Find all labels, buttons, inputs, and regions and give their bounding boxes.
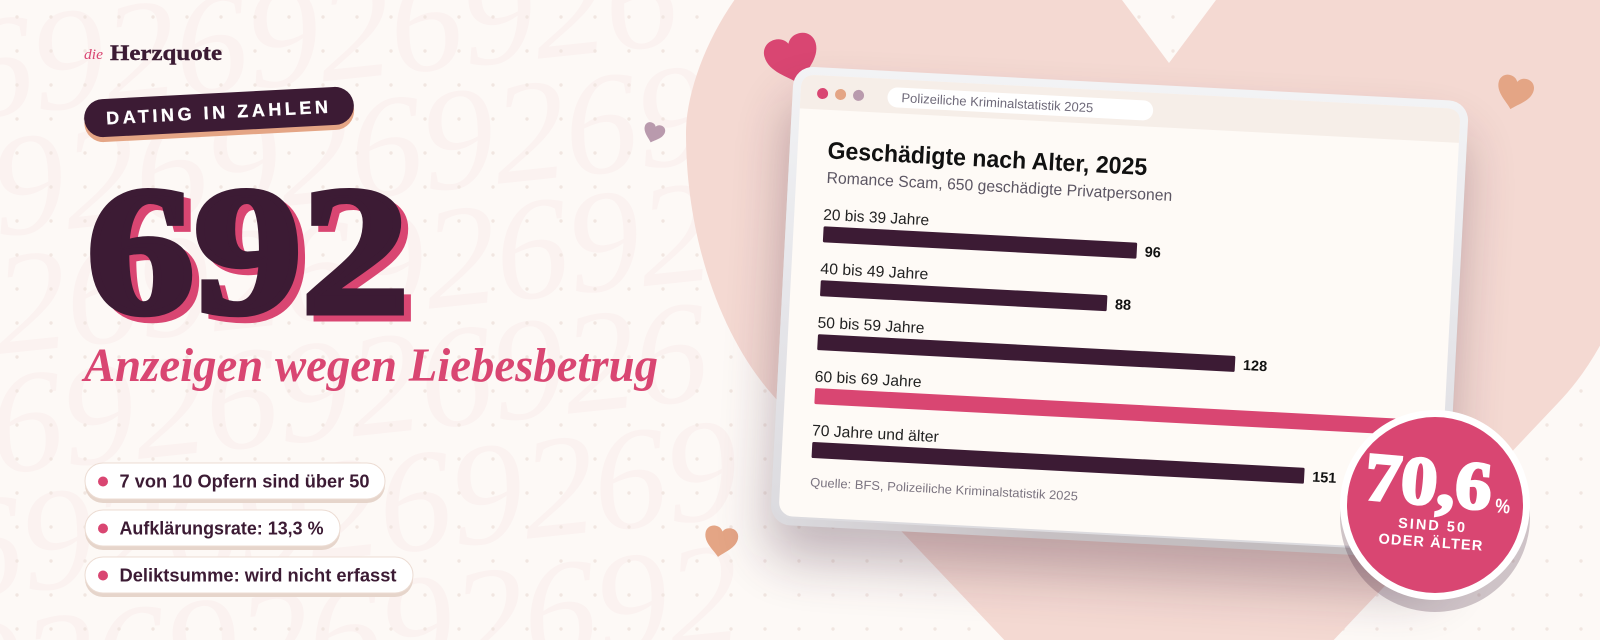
tag: Dating in Zahlen [83, 86, 355, 143]
logo: die Herzquote: Herzquote [110, 40, 222, 65]
browser card [770, 66, 1473, 560]
background pattern: repeated 692 numerals: 6926926926 [0, 269, 715, 506]
bar chart: 50 bis 59 Jahre [817, 315, 925, 337]
fact pill 3 [85, 557, 413, 597]
bar chart: 20 bis 39 Jahre [823, 207, 930, 229]
logo: die Herzquote: die [84, 47, 103, 63]
headline number 692: 692 [87, 151, 409, 352]
browser title bar [800, 74, 1461, 143]
bar chart: 96 [1144, 245, 1161, 261]
big background heart [686, 0, 1600, 640]
badge: 70,6 %: ODER ÄLTER [1378, 530, 1483, 555]
card shadow [766, 100, 1465, 593]
headline number 692: 692 [94, 157, 416, 358]
bar chart: 151 [1312, 470, 1337, 487]
bar chart: 70 Jahre und älter [811, 422, 939, 446]
source note: Quelle: BFS, Polizeiliche Kriminalstatistik 2025 [810, 475, 1078, 503]
fact pill 2 [85, 510, 340, 550]
chart subtitle: Romance Scam, 650 geschädigte Privatpersonen [826, 170, 1173, 205]
fact pill 1: 7 von 10 Opfern sind über 50 [120, 472, 370, 492]
bar chart: 40 bis 49 Jahre [820, 261, 929, 283]
heart: mauve [641, 121, 667, 146]
browser title bar: Polizeiliche Kriminalstatistik 2025 [901, 90, 1094, 115]
badge: 70,6 %: % [1494, 495, 1511, 519]
background pattern: repeated 692 numerals [0, 0, 788, 640]
badge: 70,6 %: 70,6 [1362, 438, 1495, 525]
subheading: Anzeigen wegen Liebesbetrug [81, 339, 658, 392]
badge: 70,6 %: SIND 50 [1398, 516, 1466, 536]
bar chart: 187 [1431, 422, 1456, 439]
fact pill 2: Aufklärungsrate: 13,3 % [120, 518, 324, 538]
bar chart [810, 207, 1466, 493]
bar chart: 88 [1115, 297, 1131, 314]
bar chart: 60 bis 69 Jahre [814, 369, 922, 391]
fact pill 1 [85, 463, 385, 503]
badge: 70,6 % [1340, 410, 1530, 612]
heart: pink top left of card [761, 30, 825, 90]
bar chart: 128 [1243, 358, 1268, 375]
tag: Dating in Zahlen: DATING IN ZAHLEN [106, 97, 328, 128]
heart: peach lower [702, 524, 740, 560]
chart heading: Geschädigte nach Alter, 2025 [827, 137, 1148, 181]
heart: peach top right [1493, 73, 1536, 114]
fact pill 3: Deliktsumme: wird nicht erfasst [120, 566, 397, 586]
